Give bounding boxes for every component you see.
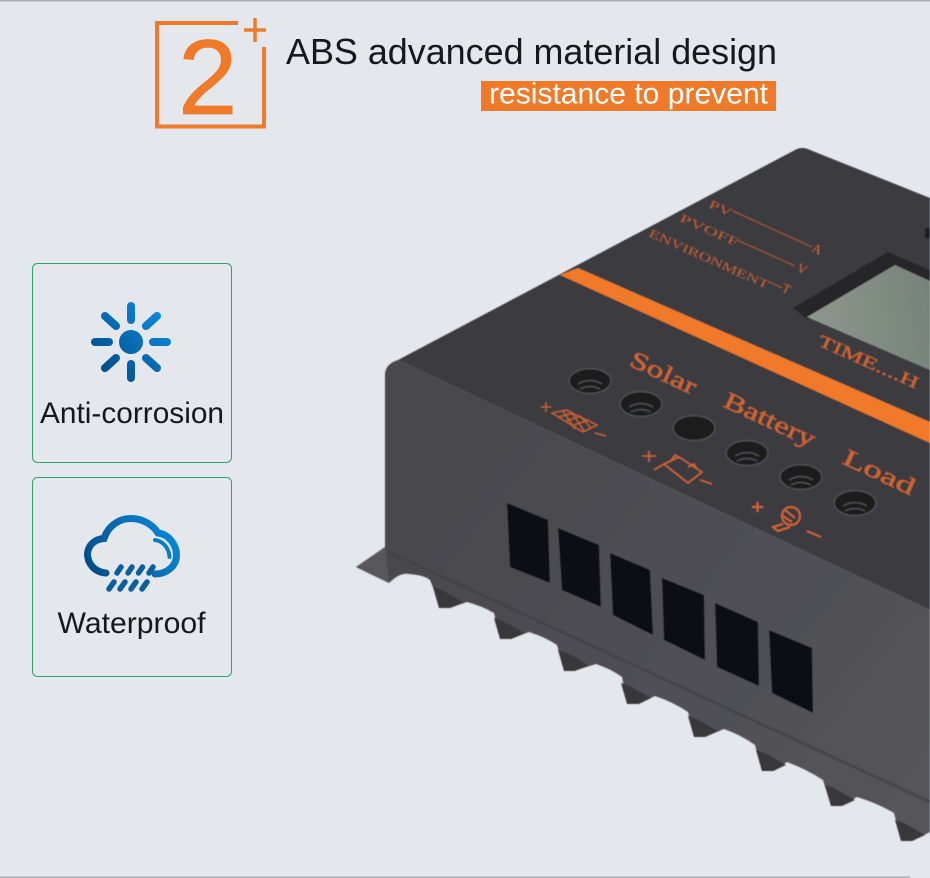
vent windows bbox=[507, 503, 813, 713]
top face bbox=[398, 148, 930, 610]
icon: bulb bbox=[752, 502, 821, 537]
label: T: T bbox=[780, 280, 793, 297]
label: V: V bbox=[795, 260, 810, 278]
header subtitle tag: resistance to prevent bbox=[489, 78, 768, 110]
icon: solar panel bbox=[541, 402, 606, 436]
label: A: A bbox=[810, 240, 825, 258]
label: Battery: Battery bbox=[719, 388, 819, 453]
label: TIME: TIME....H bbox=[815, 331, 922, 393]
indicator unit lines bbox=[733, 211, 812, 288]
icon: sun bbox=[95, 306, 167, 378]
plus sign bbox=[244, 18, 266, 42]
LCD screen bbox=[807, 265, 930, 370]
mounting feet shading bbox=[433, 587, 925, 841]
product photo: solar charge controller bbox=[356, 148, 930, 841]
panel: anti-corrosion bbox=[32, 264, 232, 462]
number 2: 2 bbox=[178, 17, 238, 137]
icon: rain cloud bbox=[88, 518, 176, 589]
header title: ABS advanced material design bbox=[286, 31, 777, 72]
corner button bbox=[925, 228, 930, 238]
label: environment: ENVIRONMENT bbox=[647, 226, 772, 292]
panel: waterproof bbox=[32, 478, 232, 676]
label: Solar: Solar bbox=[625, 347, 701, 400]
label: Load: Load bbox=[838, 445, 919, 501]
label: PV OFF: PVOFF bbox=[678, 211, 742, 250]
label: waterproof: Waterproof bbox=[58, 607, 206, 640]
terminal screws bbox=[569, 368, 876, 516]
orange stripe bbox=[560, 268, 930, 443]
header: feature number badge bbox=[157, 17, 266, 137]
LCD bezel bbox=[793, 252, 930, 320]
label: anti-corrosion: Anti-corrosion bbox=[40, 397, 224, 430]
label: PV: PV bbox=[707, 197, 735, 220]
icon: battery bbox=[642, 451, 712, 484]
front face with mounting feet bbox=[356, 360, 930, 841]
